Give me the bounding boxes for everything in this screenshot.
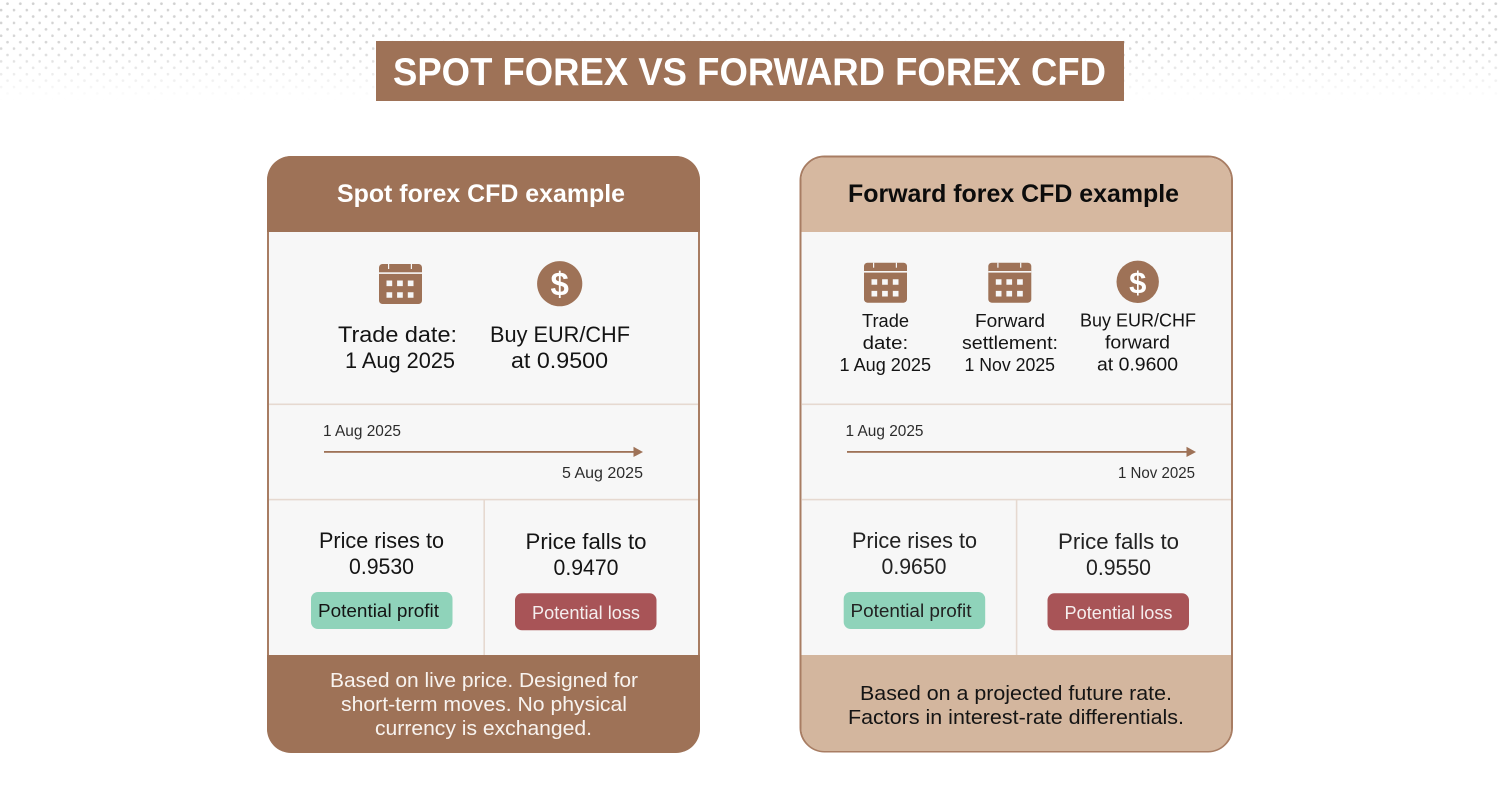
panel footer: forward — [802, 655, 1231, 751]
trade date text — [840, 310, 931, 375]
outcome: price falls: Price falls to — [526, 529, 646, 554]
outcome: price rises: 0.9530 — [349, 554, 414, 579]
panel footer: spot: short-term moves. No physical — [341, 693, 627, 716]
outcome: price falls: Price falls to — [1058, 529, 1179, 554]
panel header: forward: Forward forex CFD example — [848, 180, 1179, 208]
icon: calendar settlement — [988, 263, 1031, 303]
outcome: price falls — [1048, 529, 1189, 630]
outcome: price rises — [311, 528, 452, 629]
buy forward text — [1080, 310, 1196, 374]
outcome: price falls — [515, 529, 656, 630]
icon: dollar coin — [537, 261, 582, 306]
outcome: price rises: Potential profit — [318, 600, 439, 621]
panel header: forward — [802, 158, 1231, 232]
panel footer: spot: currency is exchanged. — [375, 717, 592, 740]
outcome: price rises: Price rises to — [319, 528, 444, 553]
panel: spot forex CFD example — [267, 156, 700, 753]
icon: dollar coin: $ — [551, 266, 569, 302]
forward settlement text — [962, 310, 1058, 375]
timeline: forward: 1 Aug 2025 — [846, 423, 924, 440]
outcome: price falls: Potential loss — [1064, 602, 1172, 623]
title banner — [376, 41, 1124, 101]
timeline: spot — [323, 423, 643, 482]
outcome: price falls: Potential loss — [532, 602, 640, 623]
forward settlement text: settlement: — [962, 332, 1058, 353]
outcome: price rises: 0.9650 — [882, 554, 946, 579]
panel footer: spot — [267, 655, 700, 753]
buy price text: at 0.9500 — [511, 348, 608, 373]
buy forward text: forward — [1105, 332, 1170, 352]
trade date text: 1 Aug 2025 — [840, 354, 931, 375]
timeline: forward — [846, 423, 1196, 482]
timeline: spot: 1 Aug 2025 — [323, 423, 401, 440]
trade date text: Trade date: — [338, 322, 457, 347]
buy price text: Buy EUR/CHF — [490, 322, 630, 347]
icon: calendar trade date — [864, 263, 907, 303]
timeline: forward: 1 Nov 2025 — [1118, 465, 1195, 482]
trade date text: 1 Aug 2025 — [345, 348, 455, 373]
trade date text: date: — [863, 332, 908, 353]
icon: dollar coin — [1116, 261, 1159, 303]
trade date text — [338, 322, 457, 373]
forward settlement text: 1 Nov 2025 — [964, 354, 1055, 375]
buy price text — [490, 322, 630, 373]
outcome: price rises: Price rises to — [852, 528, 977, 553]
outcome: price falls: 0.9550 — [1086, 555, 1151, 580]
outcome: price rises: Potential profit — [850, 600, 972, 621]
timeline: spot: 5 Aug 2025 — [562, 465, 643, 482]
panel footer: spot: Based on live price. Designed for — [330, 669, 638, 692]
buy forward text: at 0.9600 — [1097, 354, 1178, 374]
panel footer: forward: Based on a projected future rate. — [860, 682, 1172, 705]
forward settlement text: Forward — [975, 310, 1045, 331]
panel footer: forward: Factors in interest-rate differentials. — [848, 706, 1184, 729]
panel header: spot: Spot forex CFD example — [337, 180, 625, 208]
title banner: SPOT FOREX VS FORWARD FOREX CFD — [393, 51, 1106, 94]
outcome: price falls: 0.9470 — [554, 555, 618, 580]
panel: forward forex CFD example — [800, 156, 1232, 752]
trade date text: Trade — [862, 310, 909, 331]
buy forward text: Buy EUR/CHF — [1080, 310, 1196, 330]
icon: calendar — [379, 264, 422, 304]
outcome: price rises — [844, 528, 985, 629]
icon: dollar coin: $ — [1129, 265, 1146, 300]
panel header: spot — [267, 156, 700, 232]
